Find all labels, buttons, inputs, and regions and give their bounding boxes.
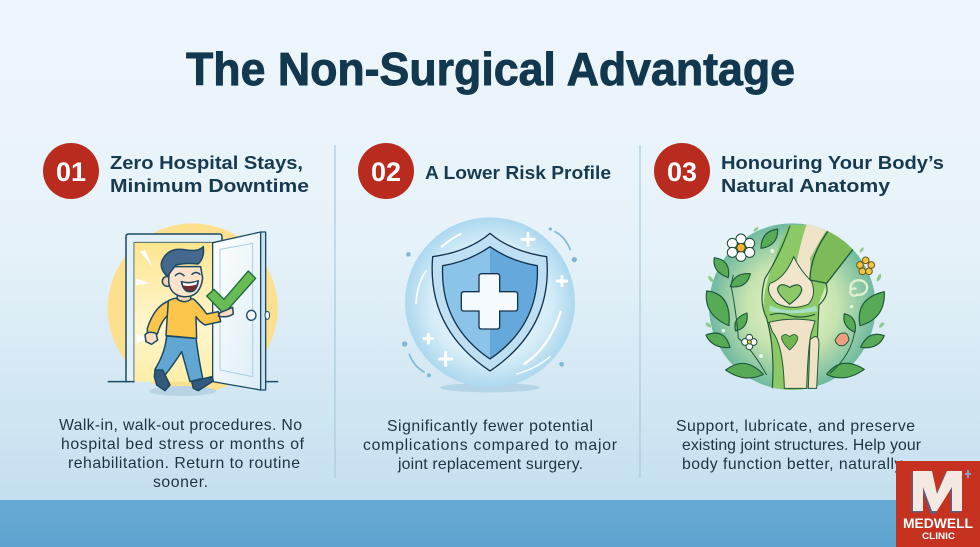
- heading 01: Minimum Downtime: [110, 175, 309, 196]
- icon: shield with cross in bubble: [402, 217, 577, 392]
- body text 01: [59, 417, 305, 491]
- title: The Non-Surgical Advantage: [186, 43, 795, 95]
- check mark: [207, 271, 256, 314]
- icon: knee joint with leaves and flowers: [705, 223, 885, 390]
- panel: lower risk profile: [358, 143, 617, 473]
- number badge 03: [654, 143, 710, 199]
- body text 03: body function better, naturally.: [682, 456, 906, 473]
- head: [177, 293, 191, 302]
- body text 02: [363, 418, 617, 473]
- heading 01: Zero Hospital Stays,: [110, 152, 303, 173]
- number badge 01: [43, 143, 99, 199]
- number badge 02: [358, 143, 414, 199]
- body text 01: sooner.: [153, 474, 208, 491]
- logo: Medwell Clinic: MEDWELL: [903, 515, 973, 531]
- body text 03: [676, 418, 921, 473]
- icon: man walking out of door with check mark: [108, 223, 278, 396]
- body text 02: Significantly fewer potential: [387, 418, 593, 435]
- body text 01: rehabilitation. Return to routine: [68, 455, 300, 472]
- heading 01: [110, 152, 309, 196]
- body text 01: Walk-in, walk-out procedures. No: [59, 417, 302, 434]
- leaves: [706, 229, 884, 378]
- body text 03: existing joint structures. Help your: [682, 437, 921, 454]
- torso and arms: [147, 301, 170, 334]
- heading 02: A Lower Risk Profile: [425, 162, 611, 183]
- logo: Medwell Clinic: CLINIC: [922, 531, 956, 541]
- body text 02: joint replacement surgery.: [397, 456, 583, 473]
- number badge 02: 02: [371, 157, 401, 187]
- number badge 01: 01: [56, 157, 86, 187]
- heading 03: [721, 152, 944, 196]
- legs: [155, 336, 203, 382]
- logo: Medwell Clinic: [896, 461, 980, 547]
- heading 03: Honouring Your Body’s: [721, 152, 944, 173]
- number badge 03: 03: [667, 157, 697, 187]
- heading 03: Natural Anatomy: [721, 175, 891, 196]
- panel: natural anatomy: [654, 143, 944, 473]
- body text 01: hospital bed stress or months of: [61, 436, 305, 453]
- panel: zero hospital stays: [43, 143, 309, 491]
- body text 03: Support, lubricate, and preserve: [676, 418, 915, 435]
- flowers: [727, 234, 757, 350]
- body text 02: complications compared to major: [363, 437, 617, 454]
